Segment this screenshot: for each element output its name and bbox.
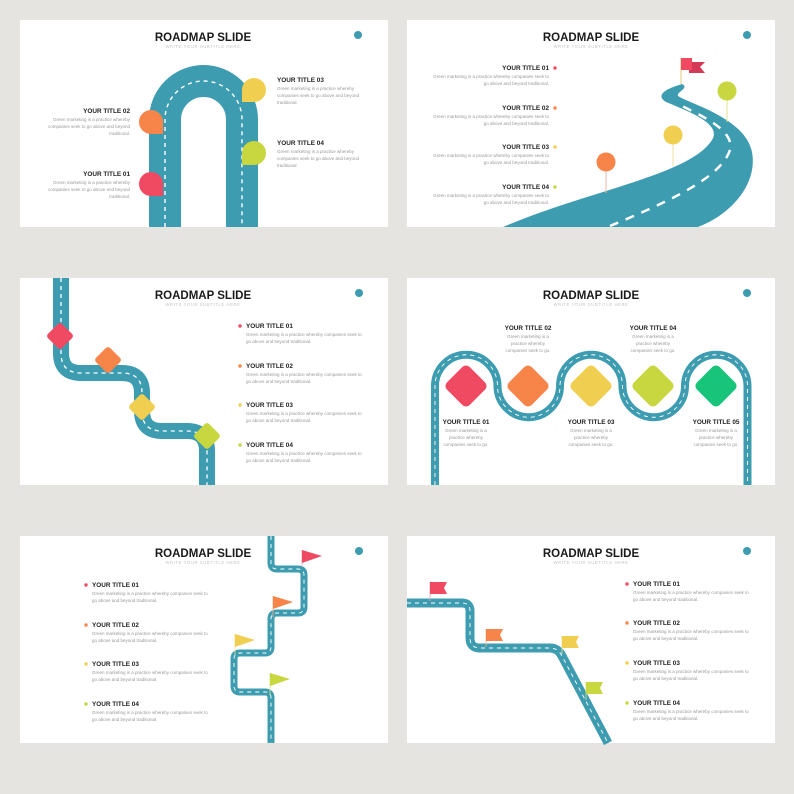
text blocks: slide 5 list: Green marketing is a practice whereby companies seek to	[92, 710, 208, 715]
text blocks: slide 6 list: Green marketing is a practice whereby companies seek to	[633, 629, 749, 634]
icon: pin yellow	[242, 78, 266, 102]
text block: title 02: traditional.	[109, 131, 130, 136]
text blocks: slide 4 labels	[443, 325, 740, 447]
text blocks: slide 2 list: go above and beyond traditional.	[484, 200, 549, 205]
icon: diamond yellow	[128, 393, 156, 421]
text blocks: slide 3 list: Green marketing is a practice whereby companies seek to	[246, 372, 362, 377]
title: ROADMAP SLIDE	[543, 548, 639, 560]
text blocks: slide 6 list	[625, 581, 749, 721]
text block: title 04: YOUR TITLE 04	[277, 140, 324, 147]
text blocks: slide 4 labels: practice whereby	[699, 435, 734, 440]
icon: lime marker	[718, 82, 736, 122]
road: descending	[407, 603, 608, 743]
text block: title 03: companies seek to go above and beyond	[277, 93, 360, 98]
text blocks: slide 4 labels: Green marketing is a	[632, 334, 674, 339]
text blocks: slide 5 list	[84, 582, 208, 722]
title: WRITE YOUR SUBTITLE HERE	[165, 44, 241, 49]
text blocks: slide 4 labels: companies seek to go.	[505, 348, 551, 353]
title: WRITE YOUR SUBTITLE HERE	[553, 302, 629, 307]
panel: slide 4 wave road	[407, 278, 775, 485]
text blocks: slide 2 list: go above and beyond traditional.	[484, 81, 549, 86]
text block: title 01: companies seek to go above and beyond	[48, 187, 130, 192]
text block: title 01	[48, 171, 131, 199]
text blocks: slide 5 list: go above and beyond traditional.	[92, 677, 157, 682]
title: ROADMAP SLIDE	[543, 32, 639, 44]
icon: pin lime	[242, 141, 266, 165]
text blocks: slide 5 list: go above and beyond traditional.	[92, 638, 157, 643]
icon: flag yellow	[235, 634, 255, 655]
text blocks: slide 3 list: go above and beyond traditional.	[246, 339, 311, 344]
text blocks: slide 6 list: YOUR TITLE 04	[633, 700, 680, 707]
text block: title 03	[277, 77, 360, 105]
text blocks: slide 2 list: YOUR TITLE 02	[502, 105, 549, 112]
text blocks: slide 3 list: Green marketing is a practice whereby companies seek to	[246, 332, 362, 337]
icon: pin red	[139, 172, 163, 196]
text blocks: slide 5 list: YOUR TITLE 03	[92, 661, 139, 668]
icon: diamond yellow	[568, 363, 614, 409]
icon: flag	[681, 58, 705, 84]
text blocks: slide 2 list: Green marketing is a practice whereby companies seek to	[433, 74, 549, 79]
text blocks: slide 5 list: Green marketing is a practice whereby companies seek to	[92, 670, 208, 675]
icon: page number	[355, 289, 363, 297]
text blocks: slide 3 list: YOUR TITLE 01	[246, 323, 293, 330]
text blocks: slide 5 list: YOUR TITLE 04	[92, 701, 139, 708]
panel: slide 1 U-road	[20, 20, 388, 227]
text blocks: slide 4 labels: practice whereby	[449, 435, 484, 440]
text blocks: slide 3 list: YOUR TITLE 04	[246, 442, 293, 449]
icon: diamond green	[693, 363, 739, 409]
text blocks: slide 2 list: go above and beyond traditional.	[484, 121, 549, 126]
panel: slide 3 winding road	[20, 278, 388, 485]
text blocks: slide 5 list: YOUR TITLE 02	[92, 622, 139, 629]
text blocks: slide 4 labels: YOUR TITLE 02	[505, 325, 552, 332]
text blocks: slide 2 list: Green marketing is a practice whereby companies seek to	[433, 193, 549, 198]
text blocks: slide 3 list: Green marketing is a practice whereby companies seek to	[246, 411, 362, 416]
text blocks: slide 4 labels: companies seek to go.	[443, 442, 489, 447]
road: winding	[61, 278, 207, 485]
text blocks: slide 5 list: YOUR TITLE 01	[92, 582, 139, 589]
icon: flag red	[430, 582, 447, 601]
text block: title 02: Green marketing is a practice whereby	[53, 117, 131, 122]
text blocks: slide 2 list: YOUR TITLE 03	[502, 144, 549, 151]
text blocks: slide 4 labels: Green marketing is a	[507, 334, 549, 339]
title: WRITE YOUR SUBTITLE HERE	[165, 302, 241, 307]
text blocks: slide 6 list: Green marketing is a practice whereby companies seek to	[633, 709, 749, 714]
icon: orange marker	[596, 152, 616, 193]
text blocks: slide 4 labels: companies seek to go.	[693, 442, 739, 447]
road: wave	[435, 355, 748, 485]
icon: page number	[743, 31, 751, 39]
text block: title 04: companies seek to go above and beyond	[277, 156, 360, 161]
text blocks: slide 4 labels: practice whereby	[574, 435, 609, 440]
icon: yellow marker	[664, 126, 682, 166]
text block: title 02: YOUR TITLE 02	[83, 108, 130, 115]
title: WRITE YOUR SUBTITLE HERE	[553, 560, 629, 565]
road: stairs	[234, 536, 304, 743]
text blocks: slide 4 labels: practice whereby	[511, 341, 546, 346]
icon: flag lime	[270, 673, 290, 695]
text blocks: slide 5 list: go above and beyond traditional.	[92, 717, 157, 722]
text blocks: slide 3 list: YOUR TITLE 03	[246, 402, 293, 409]
text blocks: slide 6 list: Green marketing is a practice whereby companies seek to	[633, 590, 749, 595]
text blocks: slide 3 list: Green marketing is a practice whereby companies seek to	[246, 451, 362, 456]
text block: title 04	[277, 140, 360, 168]
text blocks: slide 3 list: go above and beyond traditional.	[246, 418, 311, 423]
text blocks: slide 4 labels: YOUR TITLE 01	[443, 419, 490, 426]
icon: diamond lime	[630, 363, 676, 409]
text blocks: slide 2 list: Green marketing is a practice whereby companies seek to	[433, 114, 549, 119]
text blocks: slide 4 labels: Green marketing is a	[695, 428, 737, 433]
text block: title 04: Green marketing is a practice whereby	[277, 149, 355, 154]
icon: flag orange	[486, 629, 503, 647]
text blocks: slide 3 list: YOUR TITLE 02	[246, 363, 293, 370]
text blocks: slide 6 list: go above and beyond traditional.	[633, 597, 698, 602]
panel: slide 2 perspective road	[407, 20, 775, 227]
text blocks: slide 6 list: YOUR TITLE 02	[633, 620, 680, 627]
text block: title 02	[48, 108, 131, 136]
title: ROADMAP SLIDE	[543, 290, 639, 302]
road: U shape	[165, 81, 242, 227]
panel: slide 6 descending road	[407, 536, 775, 743]
text block: title 01: Green marketing is a practice whereby	[53, 180, 131, 185]
icon: diamond orange	[94, 346, 122, 374]
icon: flag orange	[273, 596, 293, 617]
title: ROADMAP SLIDE	[155, 548, 251, 560]
text block: title 03: YOUR TITLE 03	[277, 77, 324, 84]
text blocks: slide 3 list	[238, 323, 362, 463]
text blocks: slide 2 list: YOUR TITLE 01	[502, 65, 549, 72]
text block: title 04: traditional.	[277, 163, 298, 168]
text blocks: slide 4 labels: YOUR TITLE 03	[568, 419, 615, 426]
title: WRITE YOUR SUBTITLE HERE	[553, 44, 629, 49]
text block: title 03: Green marketing is a practice whereby	[277, 86, 355, 91]
text blocks: slide 2 list	[433, 65, 557, 205]
text blocks: slide 4 labels: YOUR TITLE 04	[630, 325, 677, 332]
icon: diamond red	[443, 363, 489, 409]
icon: pin orange	[139, 110, 163, 134]
text blocks: slide 3 list: go above and beyond traditional.	[246, 379, 311, 384]
text block: title 01: traditional.	[109, 194, 130, 199]
title: ROADMAP SLIDE	[155, 290, 251, 302]
icon: diamond lime	[193, 422, 221, 450]
icon: page number	[355, 547, 363, 555]
icon: diamond red	[46, 322, 74, 350]
text blocks: slide 6 list: Green marketing is a practice whereby companies seek to	[633, 669, 749, 674]
text blocks: slide 5 list: Green marketing is a practice whereby companies seek to	[92, 631, 208, 636]
text blocks: slide 5 list: Green marketing is a practice whereby companies seek to	[92, 591, 208, 596]
text blocks: slide 4 labels: companies seek to go.	[630, 348, 676, 353]
icon: flag yellow	[562, 636, 579, 654]
title: WRITE YOUR SUBTITLE HERE	[165, 560, 241, 565]
text blocks: slide 2 list: go above and beyond traditional.	[484, 160, 549, 165]
icon: diamond orange	[505, 363, 551, 409]
text blocks: slide 4 labels: practice whereby	[636, 341, 671, 346]
text blocks: slide 6 list: go above and beyond traditional.	[633, 676, 698, 681]
text blocks: slide 2 list: YOUR TITLE 04	[502, 184, 549, 191]
road: perspective	[503, 84, 753, 227]
text blocks: slide 4 labels: companies seek to go.	[568, 442, 614, 447]
text blocks: slide 6 list: go above and beyond traditional.	[633, 636, 698, 641]
text blocks: slide 3 list: go above and beyond traditional.	[246, 458, 311, 463]
icon: flag red	[302, 550, 322, 567]
text blocks: slide 5 list: go above and beyond traditional.	[92, 598, 157, 603]
icon: page number	[743, 547, 751, 555]
text blocks: slide 4 labels: YOUR TITLE 05	[693, 419, 740, 426]
text blocks: slide 4 labels: Green marketing is a	[445, 428, 487, 433]
text block: title 02: companies seek to go above and beyond	[48, 124, 130, 129]
text block: title 01: YOUR TITLE 01	[83, 171, 130, 178]
text blocks: slide 2 list: Green marketing is a practice whereby companies seek to	[433, 153, 549, 158]
text blocks: slide 6 list: YOUR TITLE 03	[633, 660, 680, 667]
text block: title 03: traditional.	[277, 100, 298, 105]
text blocks: slide 6 list: YOUR TITLE 01	[633, 581, 680, 588]
text blocks: slide 4 labels: Green marketing is a	[570, 428, 612, 433]
icon: page number	[354, 31, 362, 39]
icon: page number	[743, 289, 751, 297]
panel: slide 5 stair road	[20, 536, 388, 743]
icon: flag lime	[586, 682, 603, 700]
title: ROADMAP SLIDE	[155, 32, 251, 44]
text blocks: slide 6 list: go above and beyond traditional.	[633, 716, 698, 721]
